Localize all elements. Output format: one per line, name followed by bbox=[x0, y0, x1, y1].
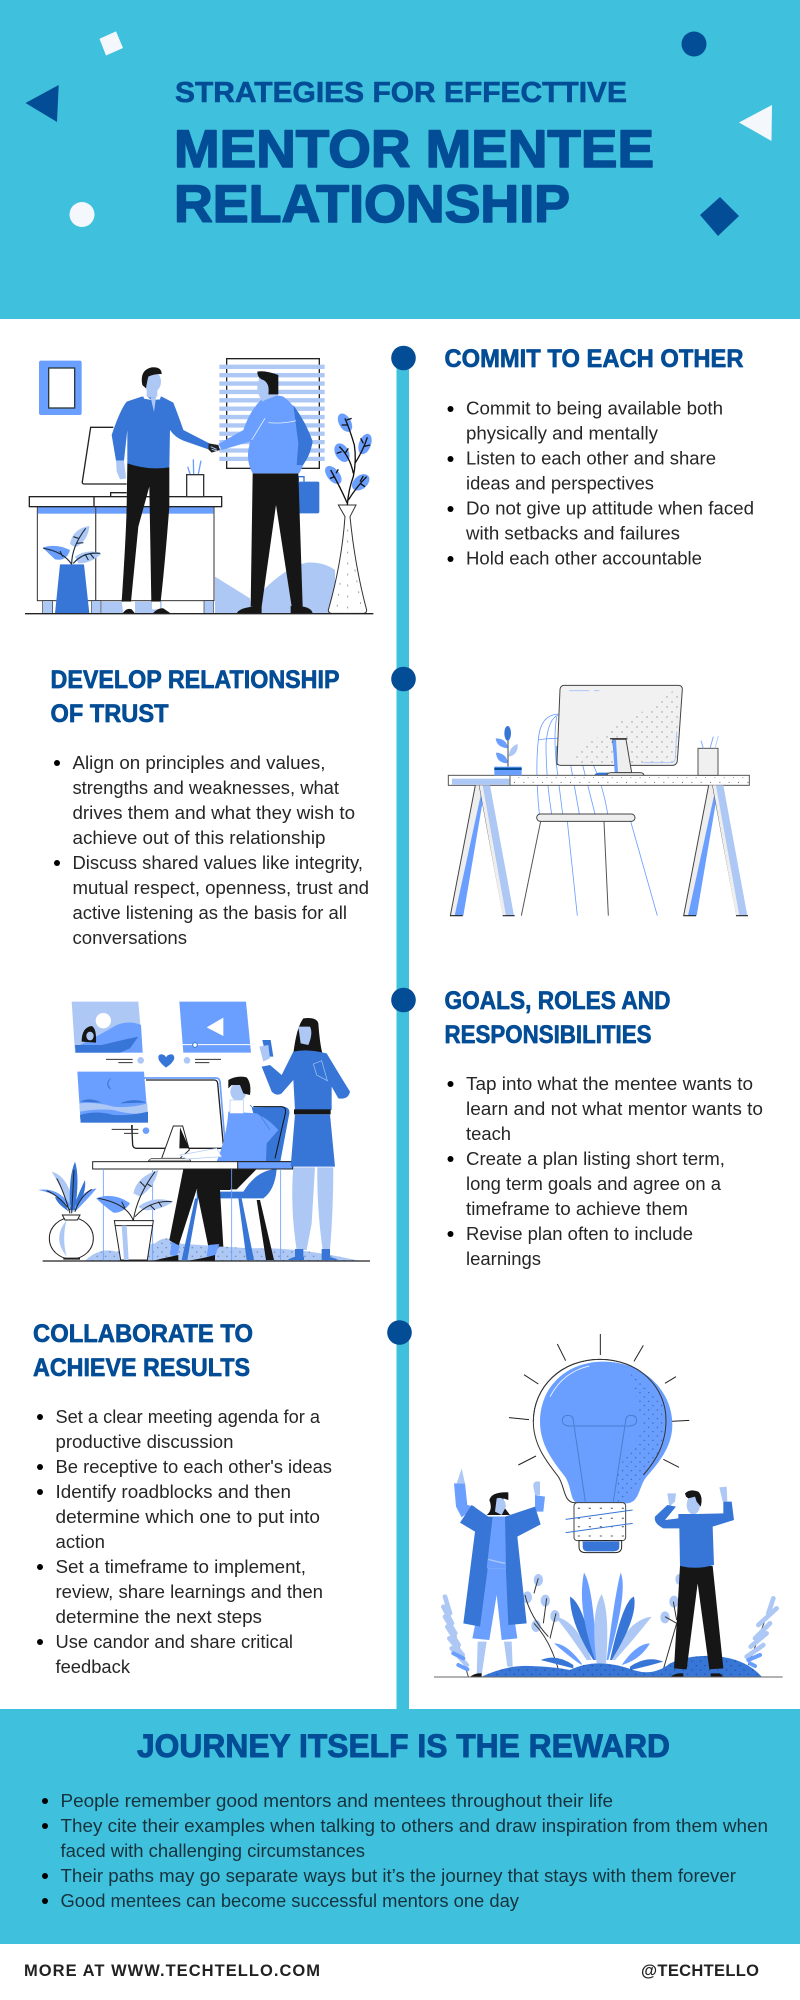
title bbox=[174, 120, 654, 234]
bullet list: Be receptive to each other's ideas bbox=[56, 1457, 332, 1477]
bullet list: achieve out of this relationship bbox=[72, 828, 326, 848]
table legs bbox=[450, 785, 515, 916]
ground plant bbox=[541, 1573, 663, 1670]
bullet list: Use candor and share critical bbox=[56, 1632, 293, 1652]
seated man bbox=[153, 1077, 278, 1261]
chair bbox=[182, 1107, 289, 1260]
bullet list: with setbacks and failures bbox=[465, 524, 680, 544]
decorative shapes bbox=[26, 31, 772, 236]
timeline bbox=[387, 346, 416, 1710]
standing woman bbox=[259, 1018, 350, 1260]
bullet list: Identify roadblocks and then bbox=[56, 1482, 291, 1502]
bullet list: timeframe to achieve them bbox=[466, 1199, 688, 1219]
bullet list: learn and not what mentor wants to bbox=[466, 1099, 763, 1119]
bullet list: teach bbox=[466, 1124, 511, 1144]
vase plant bbox=[38, 1162, 97, 1259]
heading: COLLABORATE TO bbox=[33, 1320, 253, 1348]
bullet list: Commit to being available both bbox=[466, 398, 723, 418]
panel: commit to each other bbox=[444, 345, 754, 568]
bullet list: Good mentees can become successful mentors one day bbox=[60, 1891, 519, 1911]
bullet list bbox=[448, 1074, 763, 1269]
panel: goals, roles and responsibilities bbox=[444, 987, 763, 1269]
heading bbox=[33, 1320, 253, 1382]
bullet list bbox=[37, 1407, 332, 1677]
bullet list: Set a clear meeting agenda for a bbox=[56, 1407, 321, 1427]
bullet list: People remember good mentors and mentees throughout their life bbox=[60, 1791, 613, 1811]
heading bbox=[444, 987, 670, 1049]
illustration: desk with monitor bbox=[448, 685, 749, 916]
heading: JOURNEY ITSELF IS THE REWARD bbox=[137, 1728, 670, 1764]
bullet list: physically and mentally bbox=[466, 424, 658, 444]
bullet list: productive discussion bbox=[56, 1432, 234, 1452]
bullet list: action bbox=[56, 1532, 105, 1552]
bullet list: long term goals and agree on a bbox=[466, 1174, 722, 1194]
bullet list: drives them and what they wish to bbox=[72, 803, 355, 823]
bullet list bbox=[42, 1791, 768, 1911]
image card bbox=[72, 1002, 143, 1053]
bullet list: review, share learnings and then bbox=[56, 1582, 323, 1602]
twigs bbox=[523, 1574, 683, 1669]
bullet list bbox=[54, 753, 369, 948]
illustration: two men shaking hands bbox=[25, 359, 374, 614]
bullet list bbox=[448, 398, 754, 568]
bullet list: Create a plan listing short term, bbox=[466, 1149, 725, 1169]
heading: GOALS, ROLES AND bbox=[444, 987, 670, 1015]
rays bbox=[509, 1334, 689, 1467]
ground hills bbox=[482, 1656, 762, 1677]
man in sweater bbox=[218, 371, 313, 613]
side sprigs bbox=[443, 1597, 777, 1677]
potted plant bbox=[96, 1170, 173, 1260]
bullet list: active listening as the basis for all bbox=[72, 903, 347, 923]
monitor bbox=[143, 1078, 225, 1147]
heading bbox=[50, 666, 340, 728]
panel: develop relationship of trust bbox=[50, 666, 369, 948]
bullet list: Tap into what the mentee wants to bbox=[466, 1074, 753, 1094]
bullet list: Listen to each other and share bbox=[466, 448, 716, 468]
bullet list: learnings bbox=[466, 1249, 541, 1269]
heading: ACHIEVE RESULTS bbox=[33, 1354, 250, 1382]
landscape card bbox=[77, 1072, 148, 1123]
illustration: light bulb with two people bbox=[434, 1334, 783, 1677]
bullet list: faced with challenging circumstances bbox=[60, 1841, 365, 1861]
bullet list: determine the next steps bbox=[56, 1607, 262, 1627]
bulb bbox=[533, 1359, 672, 1553]
bullet list: Set a timeframe to implement, bbox=[56, 1557, 306, 1577]
bullet list: They cite their examples when talking to others and draw inspiration from them when bbox=[60, 1816, 768, 1836]
desk bbox=[93, 1162, 293, 1169]
website link: MORE AT WWW.TECHTELLO.COM bbox=[24, 1962, 320, 1980]
bullet list: Revise plan often to include bbox=[466, 1224, 693, 1244]
bullet list: feedback bbox=[56, 1657, 131, 1677]
heading: COMMIT TO EACH OTHER bbox=[444, 345, 744, 373]
woman with arms raised bbox=[454, 1468, 545, 1677]
video card bbox=[179, 1002, 251, 1053]
panel: collaborate to achieve results bbox=[33, 1320, 332, 1677]
bullet list: Their paths may go separate ways but it’s the journey that stays with them forever bbox=[60, 1866, 736, 1886]
man in jacket bbox=[112, 367, 209, 613]
bullet list: determine which one to put into bbox=[56, 1507, 320, 1527]
bullet list: Hold each other accountable bbox=[466, 548, 702, 568]
illustration: man at computer with woman bbox=[38, 1002, 370, 1261]
social handle: @TECHTELLO bbox=[641, 1962, 759, 1980]
title: RELATIONSHIP bbox=[174, 175, 570, 234]
heading: DEVELOP RELATIONSHIP bbox=[50, 666, 340, 694]
header panel bbox=[0, 0, 800, 319]
bullet list: Align on principles and values, bbox=[72, 753, 326, 773]
heading: RESPONSIBILITIES bbox=[444, 1021, 652, 1049]
footer bbox=[24, 1962, 759, 1980]
title: MENTOR MENTEE bbox=[174, 120, 654, 179]
heading: OF TRUST bbox=[50, 700, 168, 728]
subtitle: STRATEGIES FOR EFFECTTIVE bbox=[175, 77, 627, 109]
panel: journey itself is the reward bbox=[0, 1709, 800, 1944]
icon: heart bbox=[158, 1054, 174, 1068]
man with arms raised bbox=[655, 1487, 734, 1677]
bullet list: Do not give up attitude when faced bbox=[466, 498, 754, 518]
bullet list: mutual respect, openness, trust and bbox=[72, 878, 369, 898]
bullet list: strengths and weaknesses, what bbox=[72, 778, 339, 798]
bullet list: Discuss shared values like integrity, bbox=[72, 853, 363, 873]
bullet list: ideas and perspectives bbox=[466, 474, 654, 494]
desk plant bbox=[494, 726, 522, 775]
bullet list: conversations bbox=[72, 928, 187, 948]
